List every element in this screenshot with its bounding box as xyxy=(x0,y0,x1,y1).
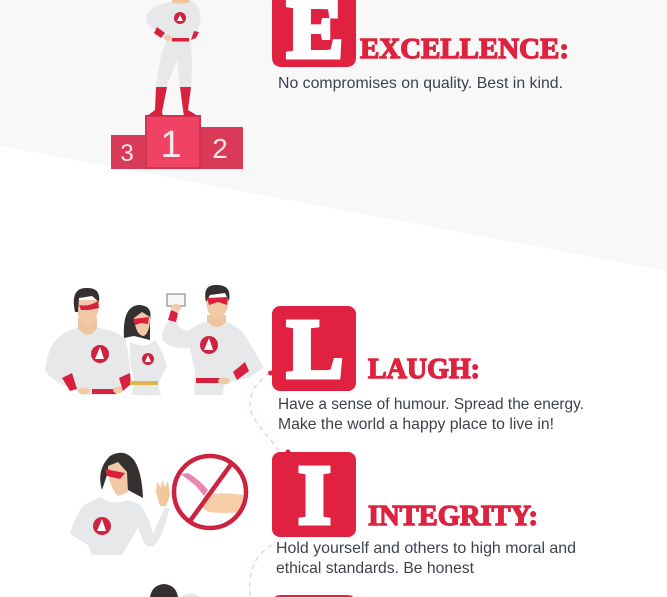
text: Integrity description xyxy=(276,540,576,577)
tile: L: L xyxy=(287,303,343,396)
text: Excellence description: No compromises on quality. Best in kind. xyxy=(278,75,563,92)
podium: 3 xyxy=(120,140,134,167)
tile: E xyxy=(272,0,356,76)
next tile, cropped xyxy=(275,595,353,597)
illustration: heroine refusing xyxy=(70,453,170,555)
text: Laugh description: Make the world a happy place to live in! xyxy=(278,416,554,433)
hero on podium xyxy=(146,0,200,116)
text: Integrity description: Hold yourself and others to high moral and xyxy=(276,540,576,557)
text: Laugh description xyxy=(278,396,584,433)
dashed path: I downward xyxy=(250,545,272,597)
dashed path: L to I xyxy=(250,373,278,450)
tile: L xyxy=(268,303,356,396)
icon: no bribery sign xyxy=(174,456,246,528)
heading: Excellence: EXCELLENCE: xyxy=(360,33,569,65)
podium: 1 xyxy=(160,124,182,166)
illustration: team of heroes xyxy=(45,285,264,395)
next hero head, cropped xyxy=(150,584,200,597)
tile: I: I xyxy=(298,449,331,542)
hero with phone xyxy=(162,285,264,395)
heroine xyxy=(124,305,167,395)
podium: 2 xyxy=(212,133,228,164)
heading: Laugh: LAUGH: xyxy=(368,354,480,385)
podium xyxy=(111,116,243,169)
heading: Integrity: INTEGRITY: xyxy=(368,501,538,532)
text: Laugh description: Have a sense of humour. Spread the energy. xyxy=(278,396,584,413)
tile: I xyxy=(272,449,356,542)
text: Integrity description: ethical standards. Be honest xyxy=(276,560,475,577)
hero left xyxy=(45,288,131,395)
